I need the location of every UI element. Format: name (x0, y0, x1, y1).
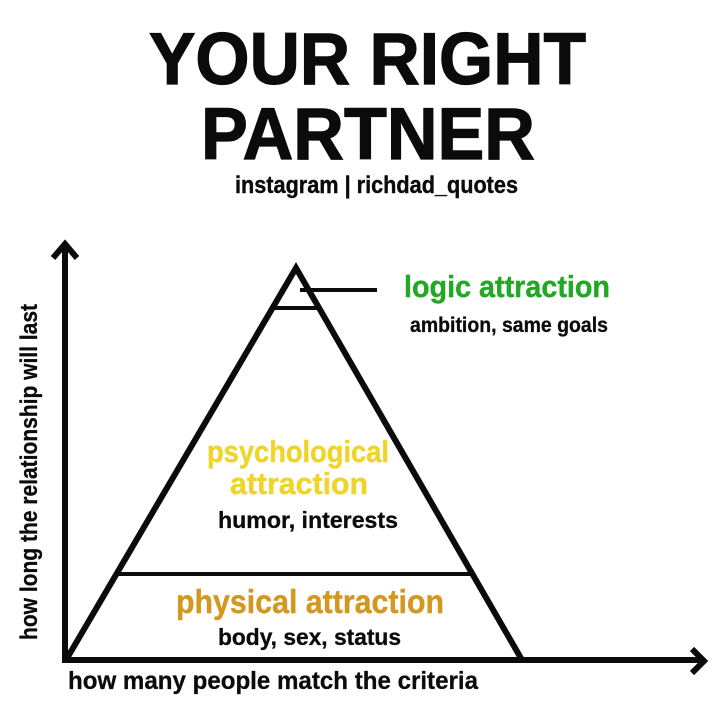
label: psychological attraction (207, 434, 398, 533)
label: logic attraction: ambition, same goals (410, 314, 608, 337)
title: PARTNER (201, 94, 535, 175)
label: physical attraction: body, sex, status (218, 624, 401, 650)
label: logic attraction (404, 269, 610, 337)
y axis arrow (53, 244, 77, 663)
label: physical attraction: physical attraction (176, 583, 444, 620)
label: logic attraction: logic attraction (404, 269, 610, 304)
title: YOUR RIGHT (149, 19, 586, 100)
label: psychological attraction: psychological (207, 434, 389, 469)
label: psychological attraction: attraction (230, 466, 368, 501)
pyramid (66, 268, 522, 660)
x axis arrow (62, 649, 704, 673)
label: physical attraction (176, 583, 444, 650)
title (149, 19, 586, 175)
leader line to logic attraction (300, 288, 377, 292)
chart axes (53, 244, 704, 673)
x axis label: how many people match the criteria (68, 667, 479, 695)
y axis label: how long the relationship will last (16, 304, 43, 640)
label: psychological attraction: humor, interests (218, 507, 398, 533)
subtitle: instagram handle: instagram | richdad_quotes (235, 172, 518, 199)
